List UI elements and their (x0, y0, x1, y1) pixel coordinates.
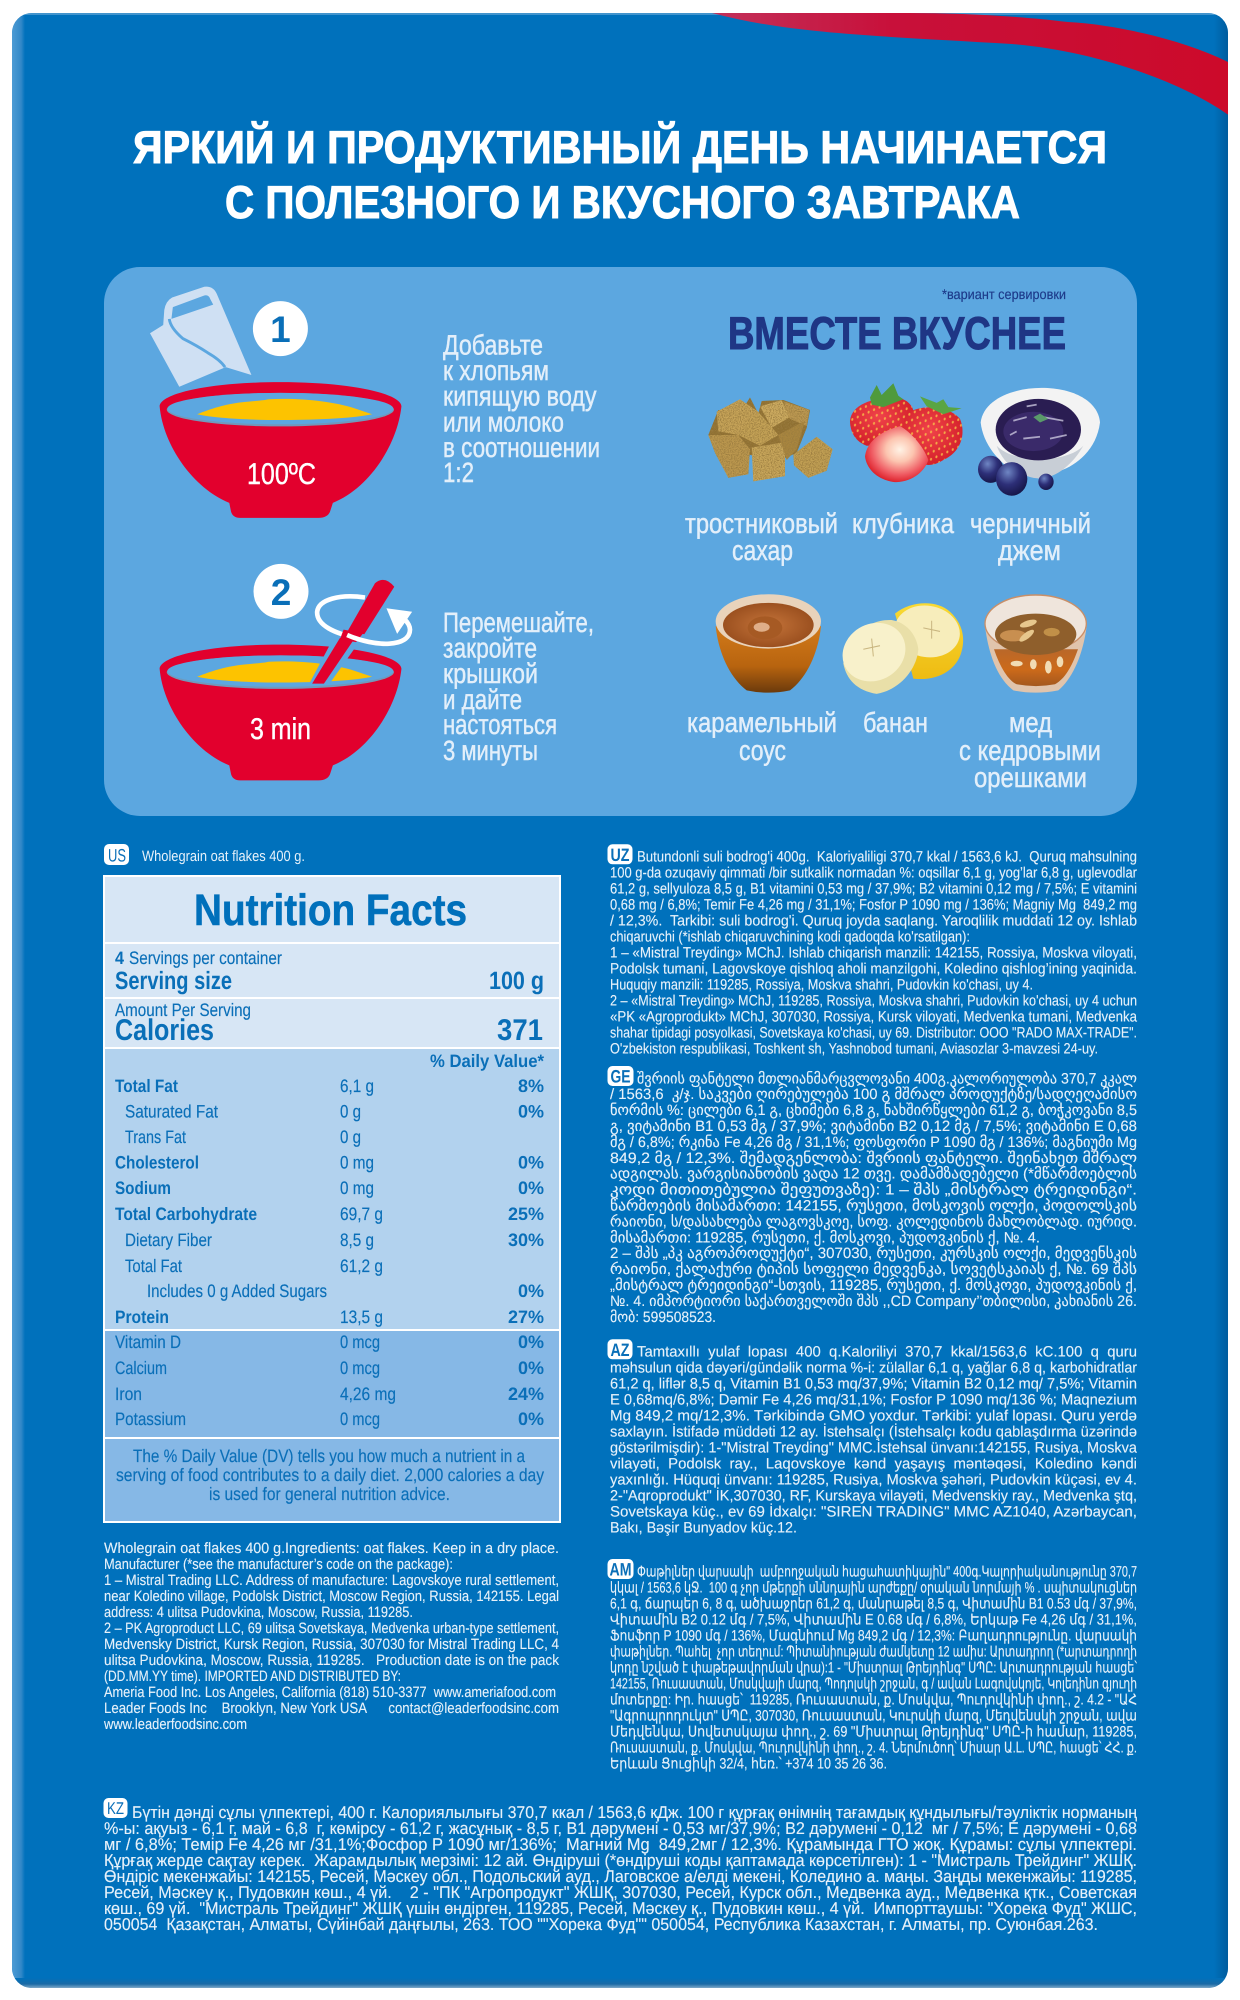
label: сахар (732, 535, 793, 566)
nutrient table: 0 g (340, 1127, 361, 1147)
US language badge and product name: US (108, 846, 126, 866)
daily value footnote: The % Daily Value (DV) tells you how much a nutrient in a (133, 1446, 526, 1466)
text block: Kazakh: 050054 Қазақстан, Алматы, Сүйінбай даңғылы, 263. ТОО ""Хорека Фуд"" 050054, Республика Казахстан, г. Алматы, пр. Суюнбая.263. (104, 1915, 1098, 1934)
text block: English ingredients and distributors: 1 – Mistral Trading LLC. Address of manufacture: Lagovskoye rural settlement, (104, 1572, 559, 1589)
text block: Armenian: Մեդվենկա, Սովետսկայա փող., շ. 69 "Միստրալ Թրեյդինգ" ՍՊԸ-ի համար, 119285, (610, 1724, 1137, 1741)
nutrient table: Potassium (115, 1409, 186, 1429)
label: черничный (970, 508, 1091, 539)
label (685, 508, 838, 566)
nutrient table: Includes 0 g Added Sugars (147, 1281, 327, 1301)
text block: Azerbaijani: məhsulun qida dəyəri/gündəlik norma %-i: zülallar 6,1 q, yağlar 6,8 q, karbohidratlar (610, 1360, 1137, 1377)
nutrient table: 0% (518, 1332, 544, 1352)
nutrient table: Calcium (115, 1358, 167, 1378)
text block: Georgian: კოდი მითითებულია შეფუთვაზე): 1 – შპს „მისტრალ ტრეიდინგი“. (610, 1182, 1137, 1199)
bowl label: time: 3 min (250, 713, 311, 746)
step 1 instructions: в соотношении (443, 432, 600, 463)
label (970, 508, 1091, 566)
text block: English ingredients and distributors: address: 4 ulitsa Pudovkina, Moscow, Russia, 119285. (104, 1604, 413, 1621)
text block: Georgian: მგ / 6,8%; რკინა Fe 4,26 მგ / 31,1%; ფოსფორი P 1090 მგ / 136%; მაგნიუმი Mg (610, 1134, 1137, 1151)
servings: 4 (115, 948, 124, 968)
text block: Kazakh: Ресей, Мәскеу қ., Пудовкин көш., 4 үй. 2 - "ПК "Агропродукт" ЖШҚ, 307030, Ресей, Курск обл., Медвенка ауд., Медвенка қтк., Советская (104, 1883, 1137, 1902)
step 2: stir and rest (160, 564, 594, 780)
calories: Calories (115, 1014, 214, 1047)
text block: Georgian: 2 – შპს „პკ აგროპროდუქტი“, 307030, რუსეთი, კურსკის ოლქი, მედვენსკის (610, 1245, 1137, 1262)
icon: strawberries (850, 383, 963, 482)
icon: pitcher (150, 287, 251, 387)
text block: Georgian: რაიონი, ს/დასახლება ლაგოვსკოე, სოფ. კოლედინოს მახლობლად. იურიდ. (610, 1213, 1137, 1230)
nutrient table: Cholesterol (115, 1152, 199, 1172)
title (133, 121, 1107, 228)
step 1 instructions: или молоко (443, 406, 564, 437)
text block: Kazakh: %-ы: ақуыз - 6,1 г, май - 6,8 г, көмірсу - 61,2 г, жасұнық - 8,5 г, В1 дәрумені - 0,53 мг/37,9%; В2 дәрумені - 0,12 мг / 7,5%; Е дәрумені - 0,68 (104, 1819, 1137, 1838)
heading: better together: ВМЕСТЕ ВКУСНЕЕ (728, 307, 1066, 359)
text block: Georgian: რაიონი, ქალაქური ტიპის სოფელი მედვენკა, სოვეტსკაიას ქ, №. 69 შპს (610, 1261, 1137, 1278)
text block: Uzbek: «PK «Agroprodukt» MChJ, 307030, Rossiya, Kursk viloyati, Medvenka tumani, Medvenka (610, 1009, 1138, 1026)
nutrient table: 0 mg (340, 1152, 374, 1172)
text block: English ingredients and distributors (103, 1540, 559, 1733)
text block: Georgian: / 1563,6 კ/ჯ. საკვები ღირებულება 100 გ მშრალ პროდუქტზე/სადღეღამისო (610, 1086, 1137, 1103)
nutrient table: 0 mcg (340, 1409, 380, 1429)
nutrient table: 25% (508, 1204, 544, 1224)
daily value footnote: serving of food contributes to a daily diet. 2,000 calories a day (116, 1465, 544, 1485)
label: карамельный (687, 707, 837, 738)
text block: Georgian: „მისტრალ ტრეიდინგი“-სთვის, 119285, რუსეთი, ქ. მოსკოვი, პუდოვკინის ქ, (610, 1277, 1137, 1294)
bowl label: temperature: 100ºC (247, 458, 316, 491)
nutrient table: 0% (518, 1152, 544, 1172)
text block: Georgian: №. 4. იმპორტიორი საქართველოში შპს ,,CD Company’’თბილისი, კახიანის 26. (610, 1293, 1137, 1310)
title: ЯРКИЙ И ПРОДУКТИВНЫЙ ДЕНЬ НАЧИНАЕТСЯ (133, 121, 1107, 173)
step 2 instructions: 3 минуты (443, 735, 538, 766)
nutrient table: Total Fat (115, 1076, 178, 1096)
text block: English ingredients and distributors: Wholegrain oat flakes 400 g.Ingredients: oat flakes. Keep in a dry place. (104, 1540, 559, 1557)
icon: red bowl with porridge (160, 382, 401, 518)
topping: strawberry (850, 383, 963, 539)
nutrient table: 6,1 g (340, 1076, 374, 1096)
text block: Armenian: Վիտամին B2 0.12 մգ / 7,5%, Վիտամին E 0.68 մգ / 6,8%, Երկաթ Fe 4,26 մգ / 31,1%, (610, 1612, 1137, 1629)
text block: Azerbaijani: Mg 849,2 mq/12,3%. Tərkibində GMO yoxdur. Tərkibi: yulaf lopası. Quru yerdə (610, 1408, 1137, 1425)
label: клубника (852, 508, 954, 539)
nutrient table: 0 g (340, 1102, 361, 1122)
text block: Azerbaijani: Sovetskaya küç., ev 69 İdxalçı: "SIREN TRADING" MMC AZ1040, Azərbaycan, (610, 1503, 1137, 1521)
text block: Georgian: გ, ვიტამინი B1 0,53 მგ / 37,9%; ვიტამინი B2 0,12 მგ / 7,5%; ვიტამინი E 0,68 (610, 1118, 1137, 1135)
nutrient table: 4,26 mg (340, 1384, 396, 1404)
label: с кедровыми (959, 735, 1101, 766)
nutrient table (115, 1051, 544, 1429)
icon: honey bowl (985, 595, 1087, 693)
step 1 instructions: Добавьте (443, 330, 543, 361)
nutrient table: Protein (115, 1307, 169, 1327)
text block: English ingredients and distributors: Leader Foods Inc Brooklyn, New York USA contact@leaderfoodsinc.com (104, 1700, 559, 1717)
nutrient table: % Daily Value* (430, 1051, 544, 1071)
text block: Uzbek: 61,2 g, sellyuloza 8,5 g, B1 vitamini 0,53 mg / 37,9%; B2 vitamini 0,12 mg / 7,5%; E vitamini (610, 881, 1137, 898)
text block: Kazakh: көш., 69 үй. "Мистраль Трейдинг" ЖШҚ үшін өндірген, 119285, Ресей, Мәскеу қ., Пудовкин көш., 4 үй. Импорттаушы: "Хорека Фуд" ЖШС, (104, 1899, 1137, 1918)
US language badge and product name (104, 844, 305, 866)
label: мед (1009, 707, 1052, 738)
icon: jam bowl and berries (978, 388, 1100, 496)
servings: Servings per container (129, 948, 282, 968)
nutrient table: Iron (115, 1384, 142, 1404)
step 1 instructions: кипящую воду (443, 381, 597, 412)
calories: Amount Per Serving (115, 1000, 251, 1020)
nutrient table: 0 mcg (340, 1358, 380, 1378)
nutrient table: Total Fat (125, 1256, 182, 1276)
text block: Georgian (608, 1066, 1137, 1326)
text block: Azerbaijani: Bakı, Bəşir Bunyadov küç.12. (610, 1520, 797, 1537)
step 2 instructions: Перемешайте, (443, 607, 594, 638)
topping: banana (835, 601, 963, 738)
nutrient table: 0% (518, 1102, 544, 1122)
nutrient table: Vitamin D (115, 1332, 181, 1352)
nutrient table: 27% (508, 1307, 544, 1327)
text block: Azerbaijani: Tamtaxıllı yulaf lopası 400 q.Kaloriliyi 370,7 kkal/1563,6 kC.100 q quru (637, 1344, 1137, 1361)
label (687, 707, 837, 766)
text block: English ingredients and distributors: www.leaderfoodsinc.com (103, 1716, 247, 1733)
nutrient table: 30% (508, 1230, 544, 1250)
topping: honey with pine nuts (959, 595, 1101, 793)
badge: GE: GE (610, 1066, 630, 1086)
nutrient table: 0 mg (340, 1178, 374, 1198)
text block: Georgian: ადგილას. ვარგისიანობის ვადა 12 თვე. დამამზადებელი (*მწარმოებლის (610, 1166, 1137, 1183)
nutrient table: Sodium (115, 1178, 171, 1198)
text block: Uzbek: 100 g-da ozuqaviy qimmati /bir sutkalik normadan %: oqsillar 6,1 g, yog’lar 6,8 g, uglevodlar (610, 865, 1137, 882)
icon: step number 1: 1 (270, 309, 291, 350)
text block: Azerbaijani: 2-"Aqroprodukt" İK,307030, RF, Kurskaya vilayəti, Medvenskiy ray., Medvenka ştq, (610, 1487, 1137, 1505)
step 2 instructions: настояться (443, 709, 557, 740)
nutrient table: Trans Fat (125, 1127, 186, 1147)
text block: Georgian: ნორმის %: ცილები 6,1 გ, ცხიმები 6,8 გ, ნახშირწყლები 61,2 გ, ბოჭკოვანი 8,5 (610, 1102, 1137, 1119)
text block: Kazakh: Бүтін дәнді сұлы үлпектері, 400 г. Калориялылығы 370,7 ккал / 1563,6 кДж. 100 г құрғақ өнімнің тағамдық құндылығы/тәуліктік норманың (132, 1803, 1138, 1822)
text block: Azerbaijani: saxlayın. İstifadə müddəti 12 ay. İstehsalçı (İstehsalçı kodu qablaşdırma üzərində (610, 1423, 1137, 1441)
step 2 instructions: закройте (443, 632, 537, 664)
nutrient table: 0 mcg (340, 1332, 380, 1352)
nutrient table: 61,2 g (340, 1256, 383, 1276)
text block: Uzbek: / 12,3%. Tarkibi: suli bodrog'i. Quruq joyda saqlang. Yaroqlilik muddati 12 oy. Ishlab (610, 913, 1137, 930)
topping: caramel sauce (687, 594, 837, 766)
step 1 instructions (443, 330, 600, 488)
text block: Georgian: 849,2 მგ / 12,3%. შემადგენლობა: შვრიის ფანტელი. შეინახეთ მშრალ (610, 1150, 1137, 1167)
nutrient table: Total Carbohydrate (115, 1204, 257, 1224)
text block: English ingredients and distributors: 2 – PK Agroproduct LLC, 69 ulitsa Sovetskaya, Medvenka urban-type settlement, (104, 1620, 559, 1637)
red ribbon (712, 13, 1230, 116)
label: орешками (974, 762, 1087, 793)
topping: cane sugar (685, 397, 838, 566)
calories (115, 1000, 543, 1047)
panel: preparation and toppings (104, 267, 1137, 816)
step 1: pour liquid (150, 287, 600, 518)
icon: red bowl with spoon and stir arrow (160, 580, 412, 780)
badge: AZ: AZ (610, 1340, 630, 1360)
topping: blueberry jam (970, 388, 1100, 566)
text block: Uzbek: Butundonli suli bodrog'i 400g. Kaloriyaliligi 370,7 kkal / 1563,6 kJ. Quruq mahsulning (637, 849, 1137, 866)
text block: Uzbek: 0,68 mg / 6,8%; Temir Fe 4,26 mg / 31,1%; Fosfor P 1090 mg / 136%; Magniy Mg 849,2 mg (610, 897, 1137, 914)
text block: Uzbek: 2 – «Mistral Treyding» MChJ, 119285, Rossiya, Moskva shahri, Pudovkin ko'chasi, uy 4 uchun (610, 993, 1137, 1010)
icon: banana slices (835, 601, 963, 694)
daily value footnote (116, 1446, 544, 1504)
text block: English ingredients and distributors: (DD.MM.YY time). IMPORTED AND DISTRIBUTED BY: (104, 1668, 401, 1685)
text block: Uzbek: shahar tipidagi posyolkasi, Sovetskaya ko'chasi, uy 69. Distributor: OOO "RADO MAX-TRADE". (610, 1025, 1137, 1042)
step 2 instructions (443, 607, 594, 766)
text block: Armenian (608, 1559, 1137, 1772)
label: соус (739, 735, 786, 766)
servings: 100 g (489, 967, 544, 995)
nutrient table: 0% (518, 1281, 544, 1301)
text block: Georgian: შვრიის ფანტელი მთლიანმარცვლოვანი 400გ.კალორიულობა 370,7 კკალ (637, 1070, 1137, 1087)
text block: Kazakh: Құрғақ жерде сақтау керек. Жарамдылық мерзімі: 12 ай. Өндіруші (*өндіруші коды қаптамада көрсетілген): 1 - "Мистраль Трейдинг" ЖШҚ. (104, 1851, 1137, 1870)
text block: Azerbaijani: vilayəti, Podolsk ray., Laqovskoye kənd yaşayış məntəqəsi, Koledino kəndi (610, 1456, 1137, 1473)
label: джем (998, 535, 1061, 566)
nutrient table: 69,7 g (340, 1204, 383, 1224)
text block: English ingredients and distributors: Ameria Food Inc. Los Angeles, California (818) 510-3377 www.ameriafood.com (104, 1684, 556, 1701)
nutrient table: 0% (518, 1409, 544, 1429)
text block: Azerbaijani: E 0,68mq/6,8%; Dəmir Fe 4,26 mq/31,1%; Fosfor P 1090 mq/136 %; Maqnezium (610, 1392, 1137, 1409)
title: С ПОЛЕЗНОГО И ВКУСНОГО ЗАВТРАКА (225, 176, 1020, 228)
step 1 instructions: к хлопьям (443, 355, 549, 386)
text block: Uzbek: 1 – «Mistral Treyding» MChJ. Ishlab chiqarish manzili: 142155, Rossiya, Moskva viloyati, (610, 945, 1137, 962)
panel: nutrition facts (103, 875, 561, 1523)
text block: Georgian: მობ: 599508523. (610, 1309, 716, 1326)
step 2 instructions: и дайте (443, 684, 522, 715)
label: банан (863, 707, 928, 738)
text block: Kazakh: Өндіріс мекенжайы: 142155, Ресей, Мәскеу обл., Подольский ауд., Лаговское а/елді мекені, Коледино а. маңы. Заңды мекенжайы: 119285, (104, 1867, 1137, 1886)
text block: Uzbek: Huquqiy manzili: 119285, Rossiya, Moskva shahri, Pudovkin ko'chasi, uy 4. (610, 977, 1033, 994)
label: тростниковый (685, 508, 838, 539)
icon: caramel bowl (716, 594, 821, 693)
text block: English ingredients and distributors: Medvensky District, Kursk Region, Russia, 307030 for Mistral Trading LLC, 4 (104, 1636, 559, 1653)
text block: Uzbek (608, 844, 1138, 1058)
icon: step number 1 (253, 301, 308, 356)
text block: English ingredients and distributors: near Koledino village, Podolsk District, Moscow Region, Russia, 142155. Legal (104, 1588, 559, 1605)
icon: step number 2: 2 (271, 572, 291, 613)
nutrient table: 24% (508, 1384, 544, 1404)
nutrient table: 8% (518, 1076, 544, 1096)
text block: Azerbaijani: göstərilmişdir): 1-"Mistral Treyding" MMC.İstehsal ünvanı:142155, Rusiya, Moskva (610, 1439, 1138, 1457)
text block: English ingredients and distributors: ulitsa Pudovkina, Moscow, Russia, 119285. Production date is on the pack (104, 1652, 559, 1669)
badge: UZ: UZ (610, 845, 630, 865)
daily value footnote: is used for general nutrition advice. (209, 1484, 450, 1504)
text block: Azerbaijani: 61,2 q, liflər 8,5 q, Vitamin B1 0,53 mq/37,9%; Vitamin B2 0,12 mq/ 7,5%; Vitamin (610, 1376, 1137, 1393)
text block: Uzbek: Podolsk tumani, Lagovskoye qishloq aholi manzilgohi, Koledino qishlog’ining yaqinida. (610, 961, 1137, 978)
calories: 371 (497, 1014, 543, 1047)
text block: Azerbaijani (608, 1339, 1138, 1537)
icon: sugar cubes (708, 397, 833, 481)
text block: Armenian: Երևան Ցուցիկի 32/4, հեռ.՝ +374 10 35 26 36. (610, 1756, 887, 1772)
heading: nutrition facts: Nutrition Facts (194, 886, 467, 935)
US language badge and product name: Wholegrain oat flakes 400 g. (142, 848, 305, 865)
step 1 instructions: 1:2 (443, 457, 474, 488)
nutrient table: Dietary Fiber (125, 1230, 212, 1250)
text block: Kazakh (104, 1798, 1138, 1934)
label (959, 707, 1101, 793)
serving note: *вариант сервировки (942, 286, 1066, 302)
servings (115, 948, 544, 995)
text block: Georgian: მისამართი: 119285, რუსეთი, ქ. მოსკოვი, პუდოვკინის ქ, №. 4. (610, 1229, 1040, 1246)
nutrient table: 8,5 g (340, 1230, 374, 1250)
icon: step number 2 (254, 564, 308, 619)
badge: AM: AM (610, 1560, 632, 1580)
nutrient table: Saturated Fat (125, 1102, 218, 1122)
badge: KZ: KZ (107, 1799, 124, 1818)
nutrient table: 0% (518, 1178, 544, 1198)
text block: Kazakh: мг / 6,8%; Темір Fe 4,26 мг /31,1%;Фосфор Р 1090 мг/136%; Магний Mg 849,2мг / 12,3%. Құрамында ГТО жоқ. Құрамы: сұлы үлпектері. (104, 1835, 1137, 1854)
nutrient table: 0% (518, 1358, 544, 1378)
text block: Azerbaijani: yaxınlığı. Hüquqi ünvanı: 119285, Rusiya, Moskva şəhəri, Pudovkin küçəsi, ev 4. (610, 1472, 1137, 1489)
text block: Uzbek: chiqaruvchi (*ishlab chiqaruvchining kodi qadoqda ko'rsatilgan): (610, 929, 970, 946)
text block: Georgian: წარმოების მისამართი: 142155, რუსეთი, მოსკოვის ოლქი, პოდოლსკის (610, 1198, 1137, 1214)
text block: English ingredients and distributors: Manufacturer (*see the manufacturer’s code on the package): (104, 1556, 453, 1573)
nutrient table: 13,5 g (340, 1307, 383, 1327)
servings: Serving size (115, 967, 232, 995)
step 2 instructions: крышкой (443, 658, 538, 689)
text block: Uzbek: O'zbekiston respublikasi, Toshkent sh, Yashnobod tumani, Aviasozlar 3-mavzesi 24-uy. (610, 1040, 1098, 1058)
